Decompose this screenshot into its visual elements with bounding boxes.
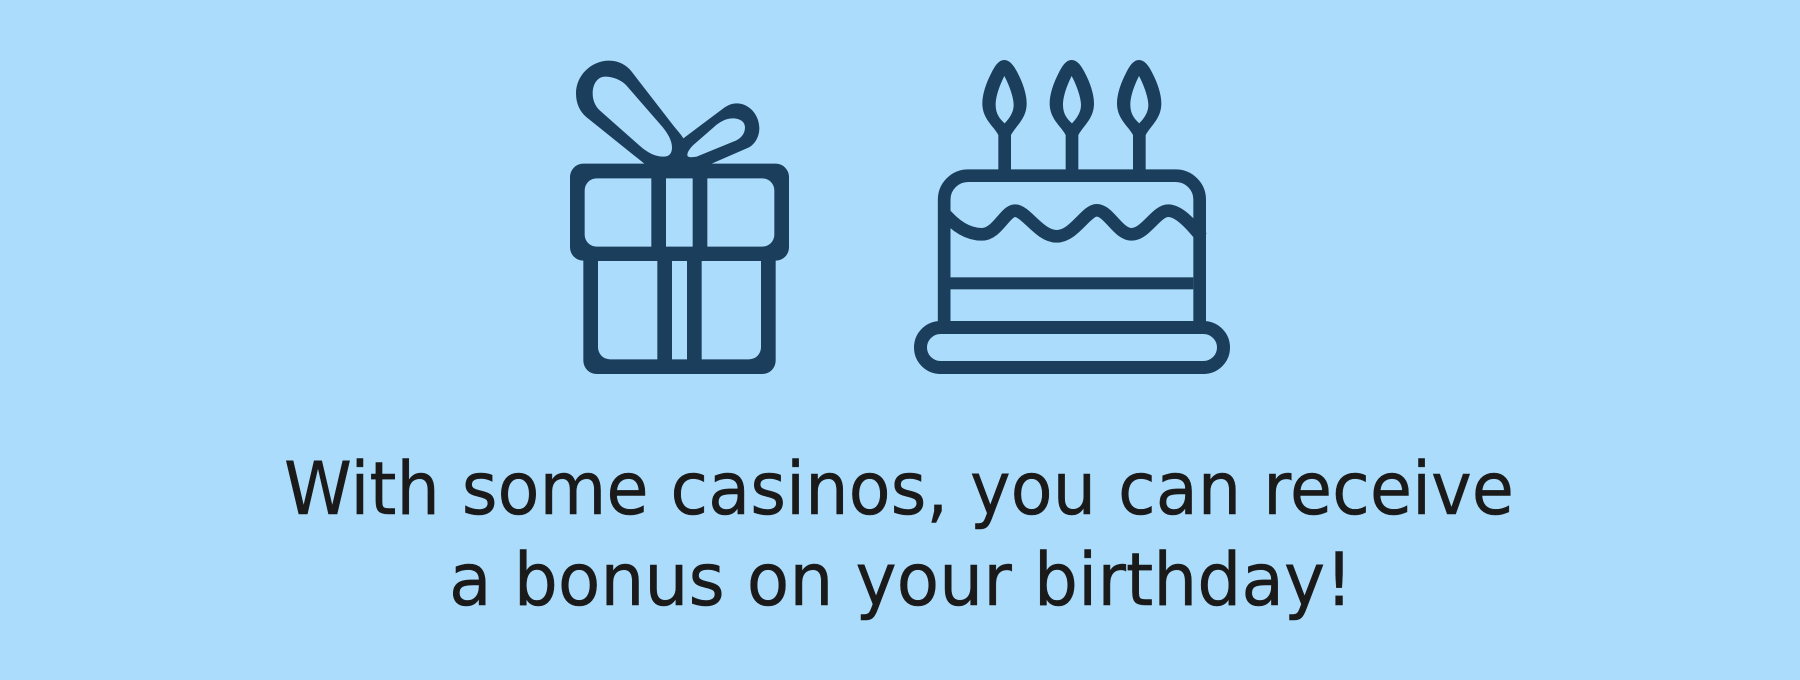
text block: caption: a bonus on your birthday! — [449, 538, 1353, 623]
text block: caption — [284, 447, 1514, 623]
icon: gift box — [570, 60, 789, 374]
cake plate — [920, 328, 1224, 368]
cake body — [944, 176, 1200, 327]
candle 1 — [982, 60, 1027, 173]
cake icing wave — [943, 210, 1202, 237]
icon: birthday cake — [914, 60, 1230, 374]
candle 3 — [1117, 60, 1161, 173]
cake stripe — [950, 277, 1193, 289]
text block: caption: With some casinos, you can receive — [284, 447, 1514, 532]
candle 2 — [1050, 60, 1094, 173]
